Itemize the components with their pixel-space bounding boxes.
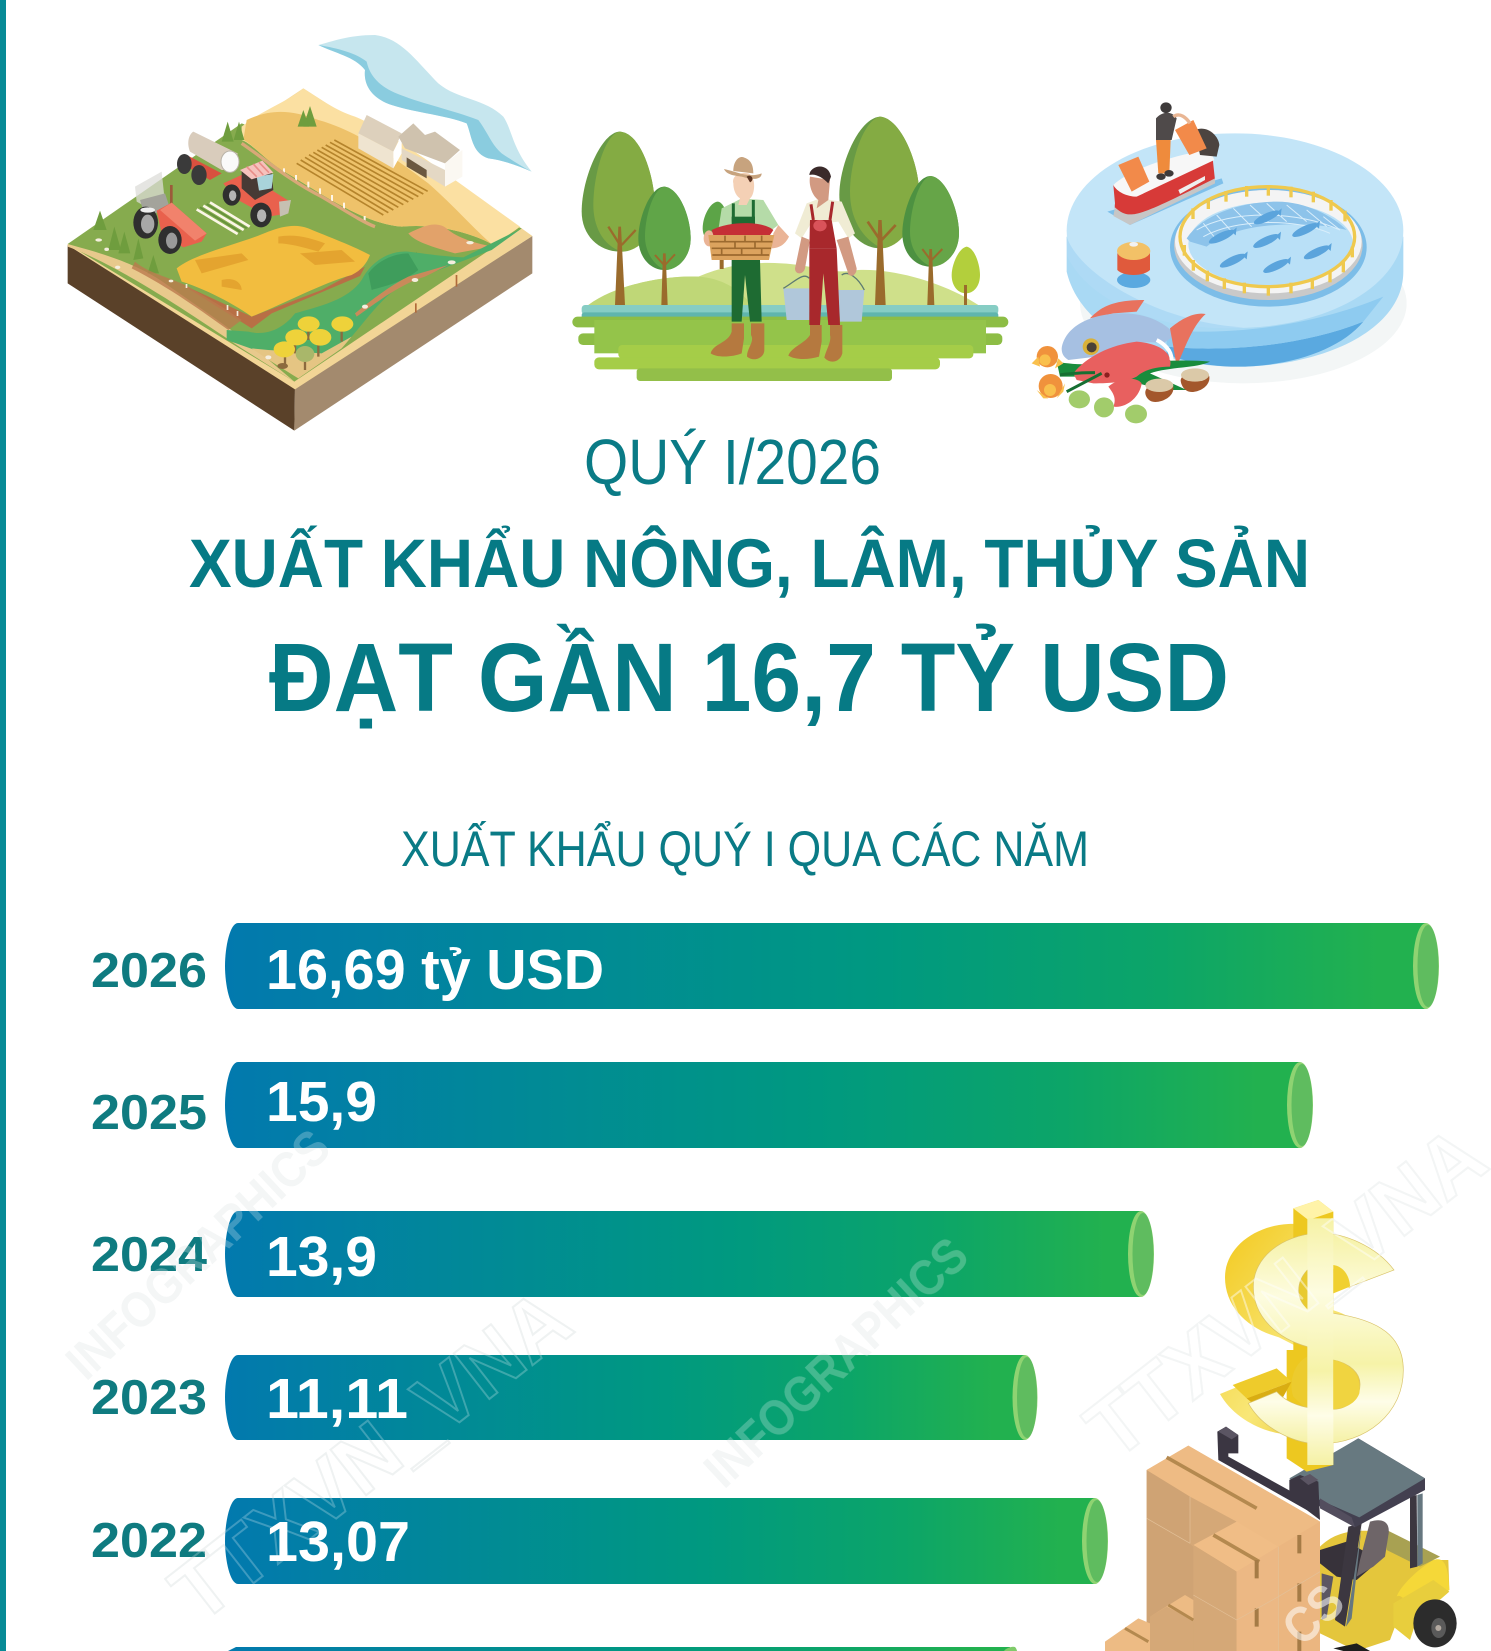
yellow trees [274, 316, 353, 370]
buoy [1117, 242, 1150, 288]
bar 2026: 16,69 tỷ USD [266, 938, 604, 1002]
bar chart [91, 923, 1439, 1651]
illustration: fish farming [1032, 102, 1407, 423]
bar 2024: 2024 [91, 1228, 207, 1282]
trees [582, 117, 980, 305]
watermark under bars: TTXVN_VNA [153, 1271, 588, 1639]
wheat field [177, 226, 370, 328]
watermark under bars [55, 1108, 1491, 1639]
illustration: isometric farm [68, 35, 532, 431]
heading: title line 1: XUẤT KHẨU NÔNG, LÂM, THỦY SẢN [189, 525, 1310, 602]
bar 2025: 2025 [91, 1086, 207, 1140]
seafood group [1032, 300, 1210, 423]
body [1320, 1520, 1457, 1651]
shadow [1080, 223, 1407, 383]
pine trees [93, 106, 422, 277]
fence posts [283, 168, 366, 222]
bar 2023: 2023 [91, 1371, 207, 1425]
bar 2022 [91, 1498, 1108, 1584]
bar 2026: 2026 [91, 944, 207, 998]
bar 2023 [91, 1355, 1038, 1440]
bar 2025: 15,9 [266, 1070, 377, 1134]
chart subtitle: XUẤT KHẨU QUÝ I QUA CÁC NĂM [401, 821, 1089, 877]
stones and fence stakes [95, 238, 474, 359]
farmed fish [1207, 208, 1332, 276]
white stripes [197, 202, 250, 234]
ground [572, 317, 1008, 381]
bar 2025 [91, 1062, 1313, 1148]
heading: period: QUÝ I/2026 [584, 426, 881, 498]
tractor right [223, 161, 291, 227]
farmer with buckets [788, 166, 857, 362]
illustration: two farmers [572, 117, 1008, 381]
top surface [68, 88, 532, 389]
extruded back [1220, 1200, 1375, 1472]
watermark under bars: INFOGRAPHICS [55, 1119, 341, 1390]
water disc [1067, 133, 1403, 367]
counter fills [1298, 1265, 1351, 1315]
bar 2022: 2022 [91, 1514, 207, 1568]
bar 2024 [91, 1211, 1154, 1297]
bar 2026 [91, 923, 1439, 1009]
fork mast [1217, 1427, 1307, 1510]
soil sides [68, 245, 295, 431]
illustration: forklift with boxes [1105, 1427, 1457, 1651]
heading: title line 2: ĐẠT GẦN 16,7 TỶ USD [269, 623, 1229, 732]
watermark over bars: INFOGRAPHICS [693, 1227, 979, 1498]
stacked cartons [1105, 1446, 1320, 1651]
watermark over bars: TTXVN_VNA [153, 1271, 588, 1639]
bar 2024: 13,9 [266, 1225, 377, 1289]
hills [588, 263, 978, 305]
trailer [177, 132, 239, 185]
cloud / river [318, 35, 532, 172]
feeding boat with worker [1107, 102, 1223, 225]
left accent stripe [0, 0, 6, 1651]
fish cage [1170, 185, 1367, 307]
bar 2023: 11,11 [266, 1367, 408, 1431]
farmer with basket [704, 157, 789, 359]
tractor left [133, 185, 207, 254]
bar 2022: 13,07 [266, 1510, 410, 1574]
green bank [227, 228, 522, 373]
water channel [582, 305, 998, 314]
watermark over forklift [1068, 1108, 1491, 1651]
farmhouses [358, 115, 462, 187]
buckets [783, 274, 864, 322]
exhaust cloud [135, 172, 164, 210]
watermark over bars [55, 1119, 979, 1639]
sand hill [242, 88, 520, 244]
front face [1248, 1218, 1403, 1465]
icon: gold dollar sign [1220, 1200, 1403, 1472]
overhead guard [1289, 1438, 1425, 1627]
watermark under bars: INFOGRAPHICS [693, 1227, 979, 1498]
bar 2021 (cropped) [228, 1647, 1017, 1651]
watermark over bars: INFOGRAPHICS [55, 1119, 341, 1390]
plowed rows [297, 140, 428, 215]
